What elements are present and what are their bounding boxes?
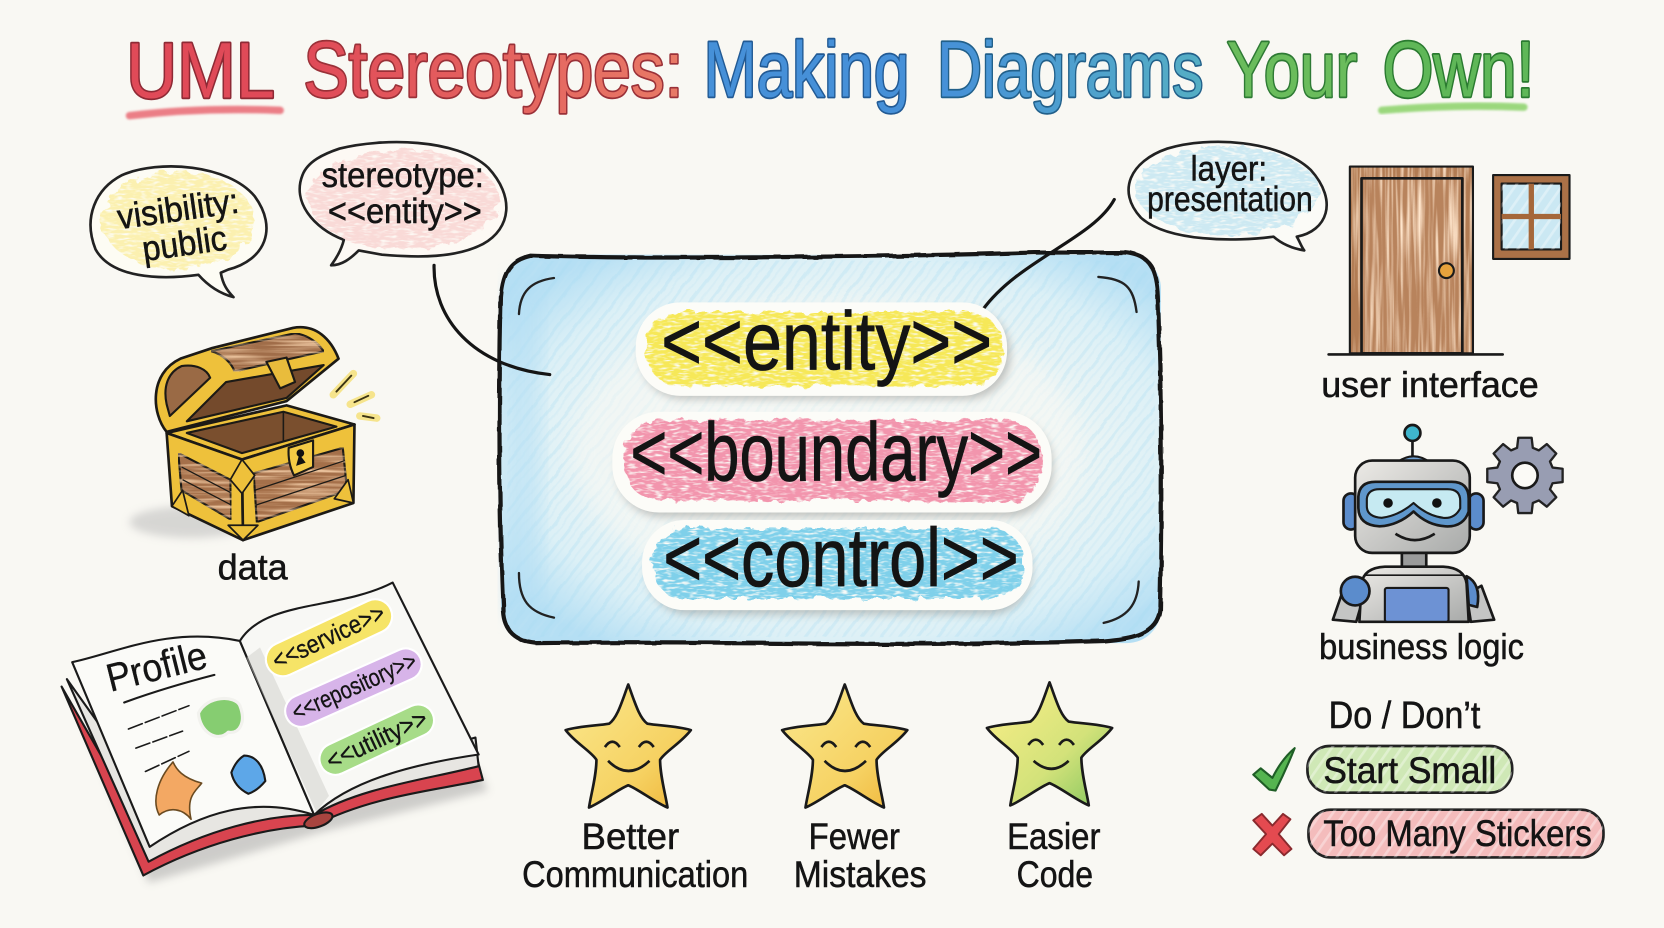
icon: profile book [62, 583, 488, 883]
speech bubble: stereotype [300, 142, 506, 265]
goggles [1358, 482, 1469, 526]
speech bubble: layer: presentation [1147, 180, 1313, 219]
star icon [782, 684, 907, 808]
title word: Your: Your [1227, 26, 1357, 114]
speech bubble: layer [1129, 142, 1327, 250]
panel background [501, 255, 1161, 643]
underline: Own [1382, 106, 1524, 110]
sticker: orange [156, 762, 202, 819]
star icon [566, 684, 691, 808]
caption: business logic: business logic [1319, 626, 1524, 667]
arms [1333, 589, 1364, 622]
star caption: Fewer [809, 815, 900, 857]
speech bubble: visibility [91, 166, 266, 297]
icon: window [1493, 175, 1570, 259]
title word: Making: Making [704, 26, 909, 114]
title word: Stereotypes: Stereotypes: [304, 26, 683, 114]
caption: data: data [218, 546, 289, 587]
floor line [1329, 353, 1503, 356]
speech bubble: stereotype: <<entity>> [328, 192, 482, 231]
label: boundary [612, 406, 1053, 517]
pill: too many stickers: Too Many Stickers [1323, 812, 1592, 854]
antenna [1411, 440, 1414, 458]
star: better communication: Communication [522, 853, 748, 895]
chest clasp [266, 358, 295, 388]
torso [1359, 567, 1469, 622]
title word: Diagrams: Diagrams [937, 26, 1203, 114]
icon: check mark [1253, 748, 1295, 791]
icon: treasure chest [130, 327, 377, 540]
label: entity: <<entity>> [661, 294, 992, 387]
main panel [500, 253, 1161, 644]
star: better communication [522, 684, 748, 895]
speech bubble: visibility: visibility: [115, 182, 241, 237]
pill: start small: Start Small [1323, 749, 1496, 791]
profile heading: Profile [102, 633, 211, 701]
chest right face [242, 424, 354, 540]
ears [1343, 493, 1358, 530]
label: control: <<control>> [663, 511, 1019, 604]
sticker: green [198, 698, 242, 736]
star: easier code: Code [1017, 853, 1093, 895]
icon: cross mark [1253, 814, 1291, 855]
speech bubble: layer: layer: [1191, 149, 1267, 188]
star caption: Better [582, 815, 679, 857]
title word: Own: Own! [1383, 26, 1534, 114]
chest corner fittings [172, 459, 353, 540]
speech bubble: visibility: public [140, 219, 229, 269]
door knob [1439, 263, 1454, 278]
speech bubble: stereotype: stereotype: [322, 156, 484, 195]
star: easier code [987, 682, 1112, 895]
head [1355, 461, 1470, 553]
book shadow [74, 700, 488, 883]
panel outline [500, 253, 1161, 644]
page stack [67, 679, 479, 862]
title word: UML: UML [126, 27, 275, 115]
chest shadow [130, 506, 253, 538]
label: boundary: <<boundary>> [630, 406, 1042, 499]
mouth [1395, 534, 1435, 540]
title [126, 26, 1534, 115]
tag: repository: <<repository>> [288, 648, 421, 727]
spine clasp [302, 809, 335, 831]
connector: layer to entity [983, 200, 1114, 310]
tag: service: <<service>> [268, 599, 389, 676]
heading: do and don't: Do / Don’t [1329, 694, 1481, 737]
neck [1402, 552, 1426, 572]
underline: UML [130, 109, 280, 116]
inner corner marks [519, 277, 1139, 623]
chest top rim [167, 405, 354, 459]
chest screen [1385, 588, 1449, 622]
sticker: blue [231, 756, 265, 794]
tag: utility: <<utility>> [322, 705, 432, 776]
shoulders [1341, 577, 1369, 605]
star icon [987, 682, 1112, 805]
chest sparkles [333, 374, 377, 418]
door panel [1362, 178, 1462, 353]
chest left face [167, 433, 243, 540]
icon: door [1329, 167, 1503, 354]
connector: stereotype to panel [434, 265, 550, 375]
star caption: Easier [1007, 815, 1100, 857]
caption: user interface: user interface [1321, 364, 1539, 405]
star: fewer mistakes [782, 684, 926, 895]
star: fewer mistakes: Mistakes [794, 853, 926, 895]
door frame [1350, 167, 1473, 353]
icon: gear [1487, 438, 1563, 513]
chest lock [289, 440, 313, 475]
profile underline and lines [124, 675, 214, 702]
left page [72, 637, 314, 847]
chest lid [156, 327, 339, 432]
icon: robot [1333, 425, 1494, 622]
right page [240, 583, 479, 815]
book cover [62, 687, 483, 875]
